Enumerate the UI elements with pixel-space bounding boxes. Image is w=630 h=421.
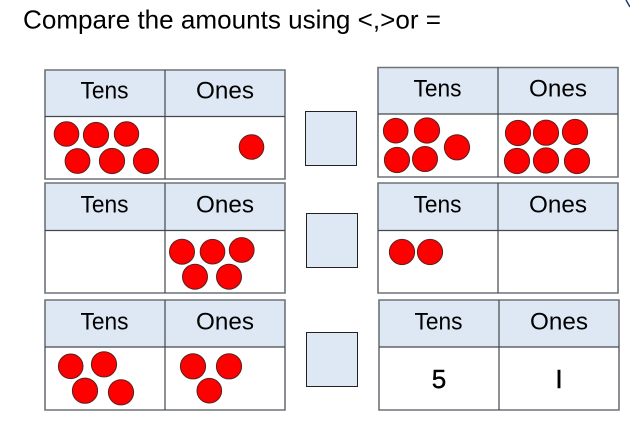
heading: ones: Ones [529, 192, 587, 218]
corner mark [626, 0, 630, 7]
heading: ones: Ones [530, 308, 588, 335]
title: Compare the amounts using <,>or = [23, 4, 441, 34]
counter: one one [239, 135, 264, 159]
answer box 2 [306, 214, 358, 268]
answer box 1 [306, 112, 356, 166]
counters: five tens [383, 118, 470, 173]
panel: bottom right place value table [379, 300, 619, 410]
heading: tens: Tens [414, 308, 462, 335]
panel: top right place value table [378, 68, 618, 177]
answer box 3 [306, 332, 358, 386]
counters: four tens [58, 352, 134, 405]
heading: tens: Tens [80, 78, 128, 104]
heading: tens: Tens [414, 76, 462, 102]
panel: middle left place value table [45, 183, 285, 293]
heading: tens: Tens [80, 192, 128, 218]
heading: tens: Tens [80, 308, 128, 335]
counters: six ones [504, 119, 590, 174]
heading: ones: Ones [529, 76, 587, 102]
counters: six tens [54, 122, 159, 174]
heading: ones: Ones [196, 192, 254, 218]
panel: middle right place value table [378, 183, 618, 293]
panel: top left place value table [45, 70, 285, 179]
number: one one: I [555, 364, 563, 394]
heading: tens: Tens [414, 192, 462, 218]
number: five tens: 5 [432, 364, 446, 394]
heading: ones: Ones [196, 78, 254, 104]
counters: three ones [180, 354, 242, 403]
counters: two tens [389, 239, 443, 265]
panel: bottom left place value table [45, 300, 285, 410]
counters: five ones [170, 238, 254, 289]
heading: ones: Ones [196, 308, 254, 335]
